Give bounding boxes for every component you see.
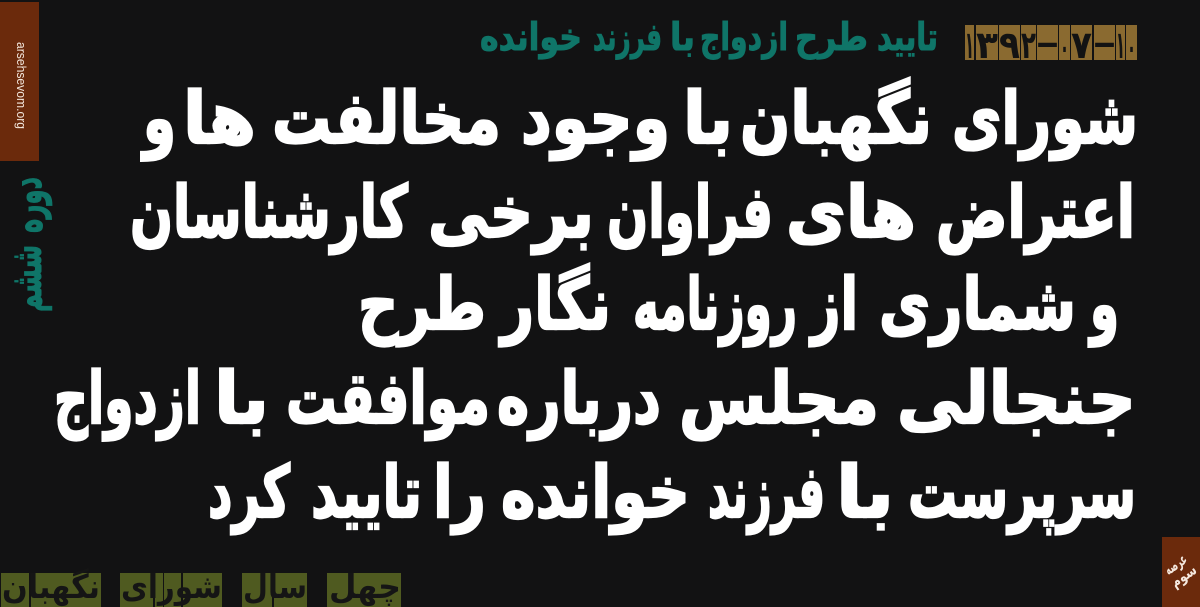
line 5 bbox=[208, 450, 1136, 535]
line 1: ها bbox=[183, 76, 256, 160]
website address: arsehsevom.org bbox=[14, 42, 28, 129]
line 3: شماری bbox=[879, 262, 1076, 347]
line 5: تایید bbox=[311, 450, 422, 534]
line 5: با bbox=[836, 450, 894, 534]
line 1: و bbox=[141, 76, 176, 161]
date stamp: ۳ bbox=[976, 23, 998, 67]
footer title: نگهبان bbox=[2, 567, 100, 607]
date stamp: ۰ bbox=[1127, 31, 1136, 66]
date stamp: ۱ bbox=[1116, 23, 1125, 67]
vertical label: term: ششم bbox=[1, 245, 52, 312]
date stamp: ۱ bbox=[965, 23, 974, 67]
line 2 bbox=[130, 170, 1135, 255]
line 4: ازدواج bbox=[54, 356, 201, 441]
line 3: روزنامه bbox=[633, 262, 797, 347]
side tab: website bbox=[0, 2, 39, 161]
line 4: مجلس bbox=[679, 356, 879, 440]
footer title: چهل bbox=[329, 567, 401, 607]
main statement bbox=[54, 76, 1138, 535]
line 3: نگار bbox=[499, 262, 611, 347]
line 4: درباره bbox=[497, 356, 661, 441]
line 2: فراوان bbox=[607, 170, 773, 255]
line 3: طرح bbox=[358, 262, 486, 347]
heading: ازدواج bbox=[700, 15, 788, 60]
date stamp: ۹ bbox=[999, 23, 1020, 67]
date stamp: ۰ bbox=[1060, 31, 1069, 66]
line 2: اعتراض bbox=[936, 170, 1135, 255]
line 4: جنجالی bbox=[897, 356, 1136, 440]
line 2: های bbox=[786, 170, 916, 254]
line 5: کرد bbox=[208, 450, 290, 535]
line 2: کارشناسان bbox=[130, 170, 408, 255]
line 2: برخی bbox=[428, 170, 594, 255]
line 4 bbox=[54, 356, 1136, 441]
date stamp: ۷ bbox=[1071, 23, 1092, 67]
line 5: خوانده bbox=[501, 450, 690, 535]
logo mark bbox=[1159, 549, 1200, 591]
heading: خوانده bbox=[480, 15, 582, 59]
line 5: را bbox=[433, 450, 486, 535]
date stamp: — bbox=[1094, 23, 1115, 63]
heading: تایید bbox=[877, 15, 938, 59]
heading: فرزند bbox=[593, 15, 662, 59]
line 4: با bbox=[214, 356, 269, 440]
line 3: از bbox=[809, 262, 858, 347]
vertical label: term: دوره bbox=[1, 177, 52, 233]
line 3: و bbox=[1088, 262, 1119, 347]
logo tab bbox=[1159, 537, 1200, 607]
line 3 bbox=[358, 262, 1119, 347]
footer title: شورای bbox=[121, 567, 222, 607]
footer title bbox=[1, 567, 401, 607]
line 1 bbox=[141, 76, 1138, 161]
date stamp bbox=[965, 23, 1137, 67]
line 1: مخالفت bbox=[272, 76, 501, 160]
line 1: شورای bbox=[952, 76, 1138, 161]
line 1: وجود bbox=[521, 76, 670, 161]
line 1: با bbox=[683, 76, 733, 160]
heading: با bbox=[670, 15, 695, 59]
heading bbox=[480, 15, 938, 60]
line 5: فرزند bbox=[708, 450, 825, 535]
date stamp: — bbox=[1037, 23, 1058, 63]
date stamp: ۲ bbox=[1021, 23, 1036, 67]
footer title: سال bbox=[243, 567, 307, 606]
heading: طرح bbox=[795, 15, 868, 59]
line 1: نگهبان bbox=[740, 76, 932, 161]
line 4: موافقت bbox=[286, 356, 490, 441]
